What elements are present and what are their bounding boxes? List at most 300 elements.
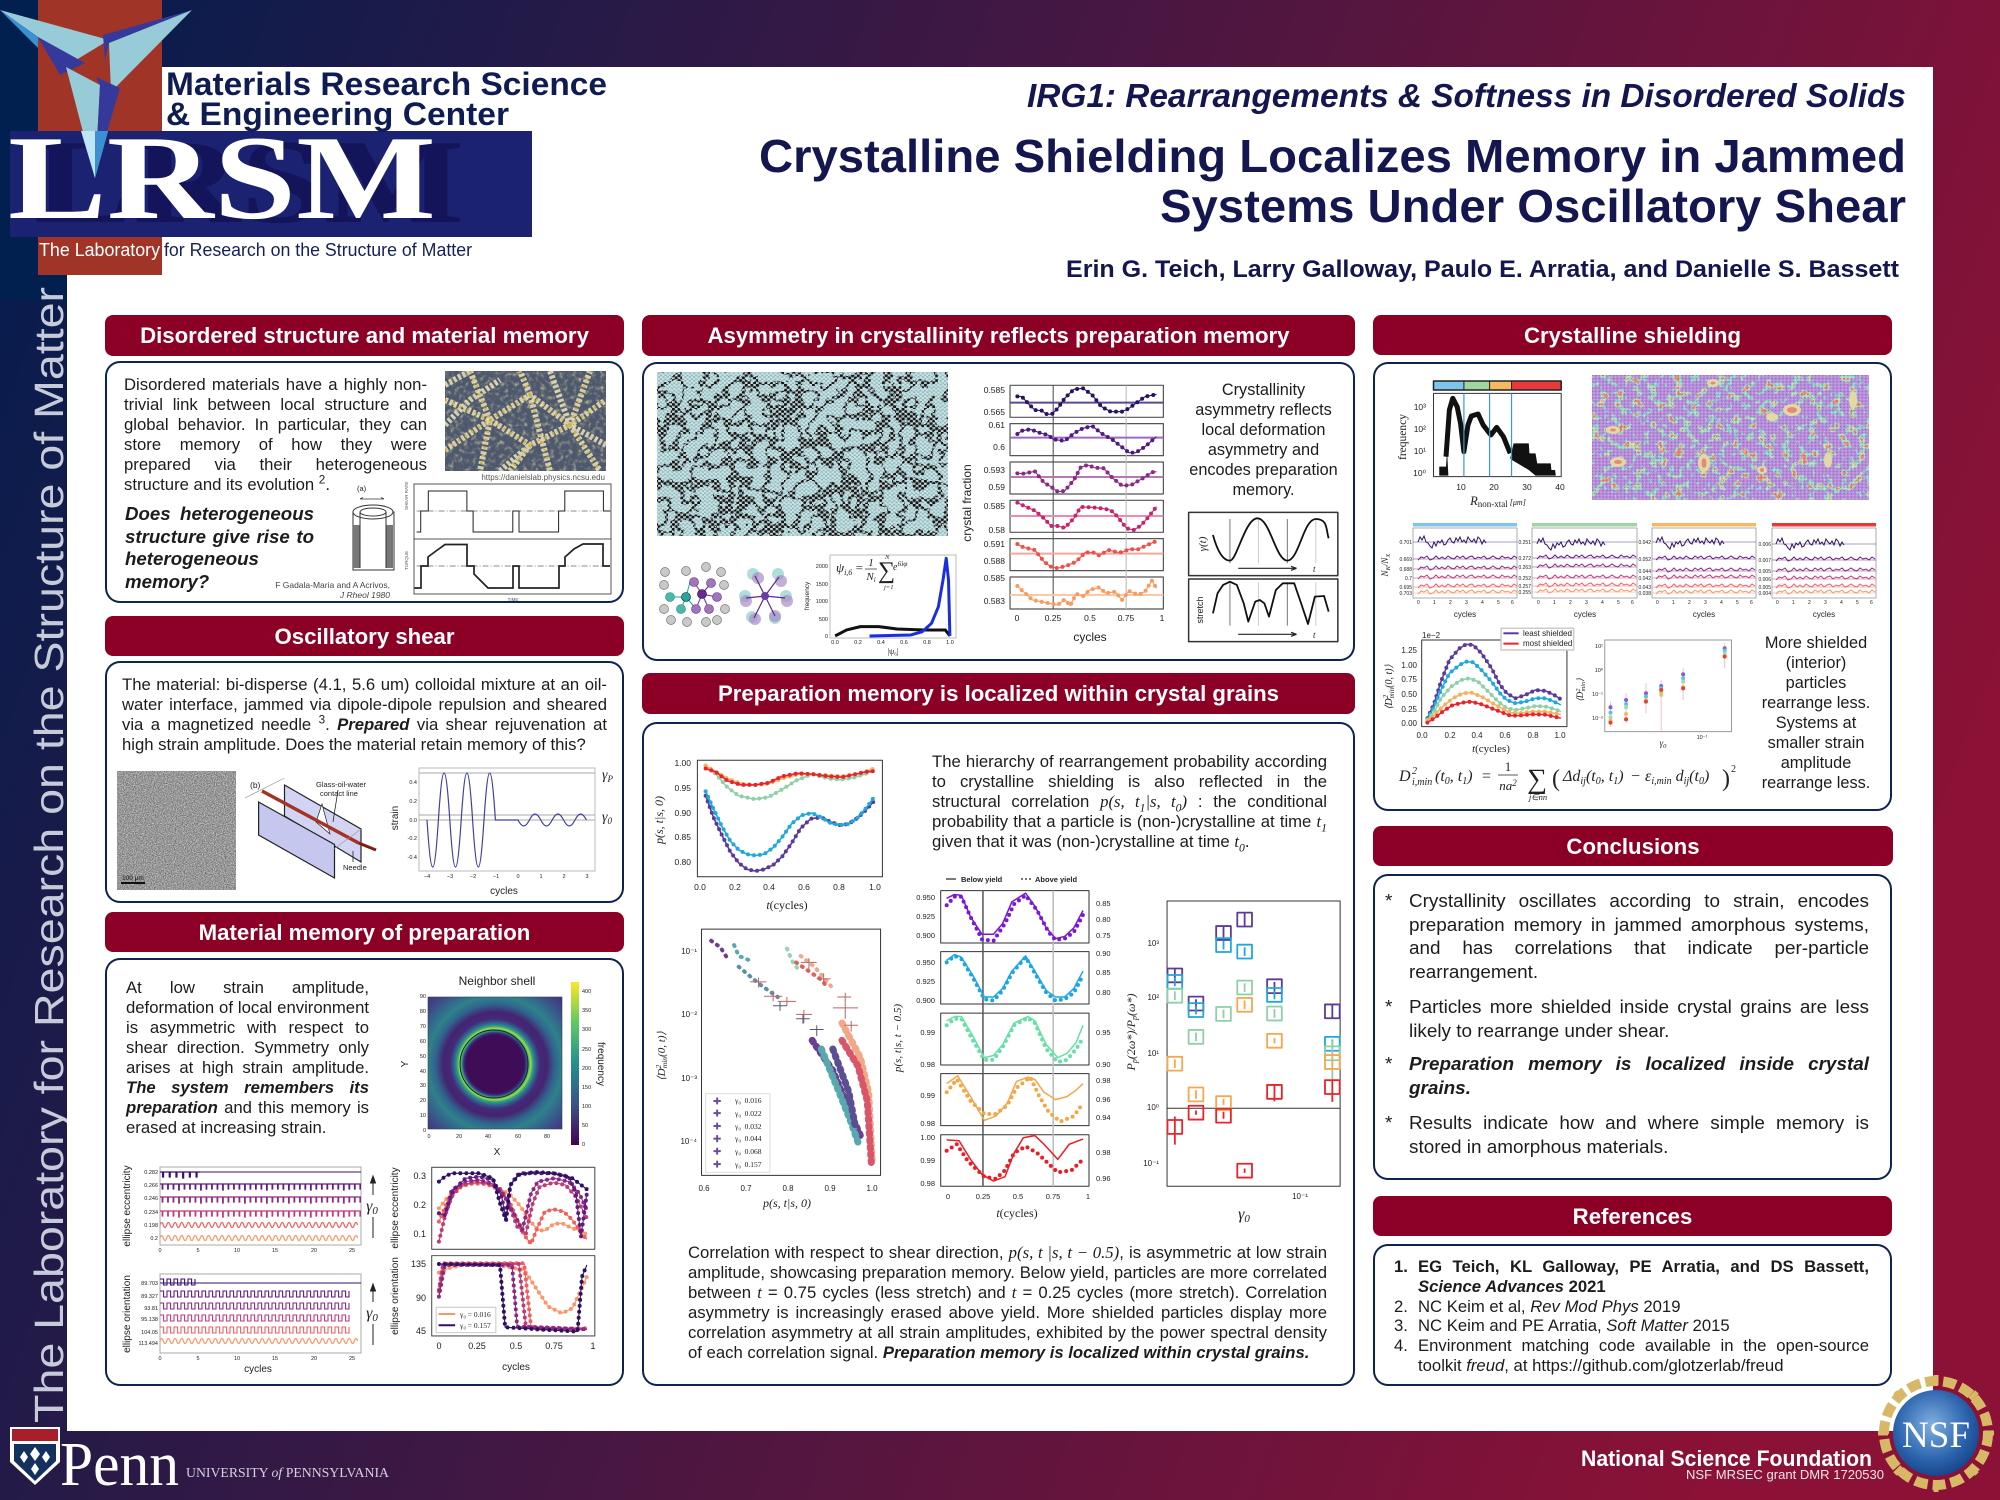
conclusion 4: [1385, 1113, 1869, 1158]
shielding distance histogram: non-xtal: [1478, 499, 1508, 509]
question text: heterogeneous: [125, 548, 259, 569]
title: Systems Under Oscillatory Shear: [1160, 180, 1906, 232]
D2min vs correlation scatter: 0.8: [782, 1184, 794, 1193]
psi6 histogram: 0.8: [923, 640, 931, 646]
neighbor shell heatmap: 80: [544, 1134, 550, 1140]
orientation per cycle chart: 45: [416, 1326, 426, 1336]
crystal fraction charts: crystal fraction: [960, 464, 974, 542]
conclusion 4: stored in amorphous materials.: [1409, 1136, 1668, 1158]
psi6 histogram: 1500: [816, 582, 828, 588]
crystal fraction by shielding charts: 0.695: [1399, 585, 1412, 591]
crystallinity caption: encodes preparation: [1189, 461, 1338, 479]
reference list: NC Keim and PE Arratia, Soft Matter 2015: [1418, 1316, 1730, 1335]
neighbor shell heatmap: 80: [420, 1009, 426, 1015]
crystal fraction by shielding charts: /N: [1380, 557, 1390, 567]
stretch schematic: [1189, 579, 1338, 642]
crystal fraction by shielding charts: 0.272: [1518, 556, 1531, 562]
conclusion 1: rearrangement.: [1409, 962, 1538, 982]
panel: conclusions: *: [1385, 1113, 1392, 1134]
crystal fraction by shielding charts: 0.701: [1399, 540, 1412, 546]
D2min vs strain chart: 10⁰: [1595, 667, 1604, 674]
D2min formula: ij: [1684, 776, 1689, 787]
conclusion 1: [1385, 891, 1869, 982]
stretch schematic: t: [1313, 630, 1316, 640]
reference list: Science Advances 2021: [1418, 1277, 1606, 1296]
correlation vs time chart: 0.0: [694, 882, 706, 892]
correlation asymmetry stacked chart: 0.925: [916, 912, 935, 921]
shielding distance histogram: 10³: [1414, 402, 1426, 412]
citation: J Rheol 1980: [339, 590, 390, 600]
ellipse orientation time series: 25: [349, 1356, 355, 1362]
shielding caption: rearrange less.: [1762, 694, 1870, 712]
D2min vs strain chart: ⟨D: [1575, 692, 1585, 702]
body text: At low strain amplitude,: [126, 978, 369, 997]
heading: disordered structure: [105, 315, 624, 356]
panel: conclusions: *: [1385, 997, 1392, 1018]
correlation asymmetry stacked chart: 0.925: [916, 977, 935, 986]
D2min vs correlation scatter: ⟨D: [656, 1068, 668, 1081]
D2min formula: (t: [1435, 768, 1445, 785]
crystal fraction charts: 0.588: [984, 556, 1005, 566]
heading: material memory: [105, 912, 624, 952]
conclusion 2: likely to rearrange under shear.: [1409, 1020, 1669, 1042]
D2min vs time chart: (0, t)⟩: [1384, 664, 1395, 688]
neighbor shell heatmap: 0: [423, 1128, 426, 1134]
D2min vs strain chart: γ: [1660, 738, 1663, 748]
neighbor shell heatmap: 20: [456, 1134, 462, 1140]
D2min formula: (t: [1689, 768, 1699, 785]
orientation per cycle chart: γ₀ = 0.157: [459, 1321, 491, 1330]
panel: oscillatory shear: [105, 661, 624, 903]
crystal fraction by shielding charts: 0.043: [1638, 585, 1651, 591]
D2min vs correlation scatter: 10⁻⁴: [680, 1137, 698, 1146]
orientation per cycle chart: 0.5: [510, 1341, 522, 1351]
body text: store memory of how they were: [124, 435, 427, 454]
correlation asymmetry stacked chart: 0.98: [1096, 1148, 1111, 1157]
ellipse eccentricity time series: 5: [196, 1248, 200, 1254]
D2min formula: 0: [1596, 776, 1601, 787]
D2min vs correlation scatter: 10⁻¹: [681, 947, 697, 956]
citation: [275, 580, 390, 600]
crystal fraction by shielding charts: 0.7: [1405, 576, 1412, 582]
conclusion 2: [1385, 997, 1869, 1042]
hierarchy text: The hierarchy of rearrangement probability according: [932, 752, 1327, 771]
orientation per cycle chart: γ₀ = 0.016: [459, 1310, 491, 1319]
neighbor shell heatmap: Neighbor shell: [459, 974, 535, 988]
hierarchy text: structural correlation p(s, t1|s, t0) : the conditional: [932, 792, 1327, 814]
D2min formula: 1: [1613, 776, 1618, 787]
correlation asymmetry stacked chart: 0.99: [920, 1028, 935, 1037]
body text: erased at increasing strain.: [126, 1118, 326, 1137]
eccentricity per cycle chart: ellipse eccentricity: [390, 1167, 401, 1249]
crystal fraction by shielding charts: 6: [1870, 600, 1873, 606]
shielding caption: [1762, 634, 1870, 792]
D2min vs time chart: 0.75: [1401, 675, 1418, 684]
crystal fraction by shielding charts: 4: [1720, 600, 1723, 606]
crystal fraction by shielding charts: N: [1380, 570, 1390, 576]
neighbor shell heatmap: 40: [420, 1069, 426, 1075]
correlation asymmetry stacked chart: p(s, t|s, t − 0.5): [892, 1004, 904, 1073]
ellipse orientation time series: γ: [366, 1305, 372, 1322]
crystal fraction by shielding charts: 4: [1601, 600, 1604, 606]
D2min formula: 2: [1412, 766, 1417, 777]
eccentricity per cycle chart: 0.3: [413, 1171, 426, 1181]
D2min formula: d: [1672, 768, 1685, 785]
D2min vs correlation scatter: γ₀ 0.032: [734, 1122, 762, 1131]
couette cell diagram: [353, 484, 394, 570]
stretch schematic: stretch: [1195, 596, 1205, 624]
neighbor shell heatmap: [400, 974, 606, 1158]
D2min vs correlation scatter: p(s, t|s, 0): [762, 1196, 811, 1210]
correlation vs time chart: 0.4: [763, 882, 775, 892]
crystallinity caption: asymmetry reflects: [1195, 401, 1332, 419]
crystal fraction charts: 0.585: [984, 501, 1005, 511]
power spectral density ratio chart: p: [1130, 1016, 1139, 1021]
D2min vs time chart: 0.0: [1416, 731, 1428, 740]
crystallinity caption: [1189, 381, 1338, 499]
ellipse orientation time series: [122, 1274, 381, 1375]
power spectral density ratio chart: 10³: [1147, 939, 1159, 948]
crystal fraction by shielding charts: 0.688: [1399, 567, 1412, 573]
shielding distance histogram: 10: [1456, 482, 1466, 492]
power spectral density ratio chart: 10⁻¹: [1292, 1192, 1308, 1201]
crystal fraction by shielding charts: 5: [1856, 600, 1859, 606]
crystal fraction by shielding charts: 2: [1449, 600, 1452, 606]
correlation vs time chart: t(cycles): [766, 898, 808, 912]
ellipse orientation time series: ellipse orientation: [122, 1275, 133, 1353]
panel: asymmetry in crystallinity: [642, 362, 1355, 661]
D2min vs time chart: 1.00: [1401, 661, 1418, 670]
power spectral density ratio chart: γ: [1238, 1206, 1244, 1223]
shielding caption: More shielded: [1765, 634, 1867, 652]
D2min vs correlation scatter: 10⁻²: [681, 1010, 697, 1019]
body text: is asymmetric with respect to: [126, 1018, 369, 1037]
panel: conclusions: *: [1385, 891, 1392, 912]
correlation asymmetry stacked chart: 0.95: [1096, 1028, 1111, 1037]
conclusion 1: preparation memory in jammed amorphous systems,: [1409, 914, 1869, 936]
D2min vs correlation scatter: (0, t)⟩: [656, 1031, 668, 1057]
crystal fraction by shielding charts: 0.263: [1518, 565, 1531, 571]
correlation asymmetry stacked chart: 1.00: [920, 1133, 935, 1142]
D2min vs time chart: 0.2: [1444, 731, 1456, 740]
correlation asymmetry stacked chart: 0.900: [916, 931, 935, 940]
psi6 histogram: j=1: [883, 584, 893, 591]
crystal fraction by shielding charts: cycles: [1813, 610, 1835, 619]
crystal fraction charts: 0.583: [984, 596, 1005, 606]
question text: structure give rise to: [125, 526, 314, 546]
rheology traces: TIME: [508, 597, 518, 602]
ellipse orientation time series: 10: [234, 1356, 240, 1362]
panel: references: 3.: [1394, 1316, 1408, 1335]
crystal fraction by shielding charts: 1: [1792, 600, 1795, 606]
correlation vs time chart: 0.80: [674, 857, 691, 867]
eccentricity per cycle chart: [390, 1167, 595, 1249]
shear cell diagram: (b): [250, 780, 261, 790]
crystal fraction by shielding charts: 5: [1617, 600, 1620, 606]
LRSM and MRSEC logo: & Engineering Center: [166, 96, 509, 132]
crystal fraction by shielding charts: 0.042: [1638, 540, 1651, 546]
LRSM and MRSEC logo: for Research on the Structure of Matter: [164, 240, 472, 260]
ellipse orientation time series: 0: [372, 1312, 378, 1324]
D2min formula: , t: [1450, 768, 1463, 785]
crystal fraction by shielding charts: 0: [1656, 600, 1659, 606]
strain protocol chart: 0.4: [409, 780, 417, 786]
crystal fraction charts: 0.58: [988, 525, 1005, 535]
D2min vs correlation scatter: 0.9: [824, 1184, 836, 1193]
strain protocol chart: cycles: [490, 886, 518, 897]
power spectral density ratio chart: 10²: [1147, 993, 1159, 1002]
heading: asymmetry in crystallinity: Asymmetry in crystallinity reflects preparation memory: [707, 323, 1290, 348]
D2min vs correlation scatter: min: [660, 1057, 669, 1068]
strain protocol chart: 0.0: [409, 818, 417, 824]
crystal fraction by shielding charts: 6: [1511, 600, 1514, 606]
ellipse orientation time series: 104.05: [141, 1330, 158, 1336]
crystal fraction charts: 0.61: [988, 420, 1005, 430]
crystal fraction by shielding charts: 0.006: [1758, 577, 1771, 583]
crystallinity caption: Crystallinity: [1222, 381, 1305, 399]
psi6 histogram: 500: [819, 617, 828, 623]
shielding distance histogram: 40: [1555, 482, 1565, 492]
shielding caption: rearrange less.: [1762, 774, 1870, 792]
orientation per cycle chart: [390, 1256, 596, 1373]
reference list: toolkit freud, at https://github.com/glotzerlab/freud: [1418, 1356, 1784, 1375]
D2min vs strain chart: 2: [1575, 688, 1582, 692]
neighbor shell heatmap: 50: [582, 1123, 588, 1129]
D2min vs time chart: 0.25: [1401, 705, 1418, 714]
correlation asymmetry stacked chart: 0.25: [976, 1192, 990, 1201]
correlation asymmetry stacked chart: 0.99: [920, 1091, 935, 1100]
body text: arises at high strain amplitude.: [126, 1058, 369, 1077]
crystal fraction by shielding charts: cycles: [1693, 610, 1715, 619]
neighbor shell heatmap: 10: [420, 1113, 426, 1119]
correlation text: [688, 1243, 1327, 1362]
citation: F Gadala-Maria and A Acrivos,: [275, 580, 390, 590]
D2min vs strain chart: 10⁻¹: [1697, 735, 1708, 741]
D2min vs correlation scatter: γ₀ 0.044: [734, 1134, 762, 1143]
crystal fraction by shielding charts: 0.007: [1758, 558, 1771, 564]
strain schematic: [1189, 512, 1338, 576]
eccentricity per cycle chart: 0.1: [413, 1229, 426, 1239]
body text: [124, 375, 427, 494]
psi6 histogram: 0: [825, 634, 828, 640]
question text: Does heterogeneous: [125, 503, 314, 524]
power spectral density ratio chart: (ω*): [1124, 994, 1138, 1016]
neighbor shell heatmap: 60: [515, 1134, 521, 1140]
correlation asymmetry stacked chart: 0.5: [1013, 1192, 1023, 1201]
D2min vs strain chart: min: [1580, 682, 1587, 692]
heading: oscillatory shear: Oscillatory shear: [274, 624, 455, 648]
reference list: Environment matching code available in the open-source: [1418, 1336, 1869, 1355]
psi6 histogram: 1: [868, 557, 874, 569]
D2min vs correlation scatter: [654, 929, 881, 1210]
correlation vs time chart: 0.85: [674, 832, 691, 842]
correlation asymmetry stacked chart: 0.900: [916, 996, 935, 1005]
ellipse orientation time series: 89.327: [141, 1294, 158, 1300]
shear cell diagram: Needle: [343, 863, 367, 872]
ellipse eccentricity time series: γ: [366, 1198, 372, 1215]
neighbor shell heatmap: 0: [582, 1142, 585, 1148]
orientation per cycle chart: 1: [590, 1341, 596, 1351]
body text: water interface, jammed via dipole-dipole repulsion and sheared: [122, 695, 607, 714]
LRSM and MRSEC logo: The Laboratory: [39, 240, 160, 260]
D2min vs correlation scatter: 0.6: [698, 1184, 710, 1193]
correlation asymmetry stacked chart: 0.75: [1096, 931, 1111, 940]
crystal fraction by shielding charts: 2: [1688, 600, 1691, 606]
correlation asymmetry stacked chart: 0.94: [1096, 1113, 1111, 1122]
body text: The system remembers its: [126, 1078, 369, 1097]
D2min formula: i,min: [1412, 777, 1432, 788]
Penn logo: Penn: [60, 1431, 179, 1499]
correlation asymmetry stacked chart: [892, 875, 1111, 1220]
heading: preparation memory localized: Preparation memory is localized within crystal grains: [718, 681, 1279, 706]
D2min vs correlation scatter: γ₀ 0.157: [734, 1160, 762, 1169]
D2min formula: 1: [1462, 776, 1467, 787]
ellipse orientation time series: 89.703: [141, 1281, 158, 1287]
crystallinity caption: asymmetry and: [1208, 441, 1319, 459]
correlation asymmetry stacked chart: Above yield: [1035, 875, 1078, 884]
reference list: NC Keim et al, Rev Mod Phys 2019: [1418, 1297, 1680, 1316]
funding text: NSF MRSEC grant DMR 1720530: [1686, 1467, 1884, 1482]
shielding distance histogram: [1397, 381, 1565, 509]
shielding color map: [1592, 375, 1869, 500]
particle map micrograph: [657, 372, 948, 536]
body text: shear direction. Symmetry only: [126, 1038, 369, 1057]
correlation vs time chart: 1.00: [674, 758, 691, 768]
orientation per cycle chart: cycles: [502, 1362, 530, 1373]
panel: conclusions: *: [1385, 1054, 1392, 1075]
psi6 histogram: N: [866, 571, 874, 583]
D2min vs time chart: [1382, 628, 1574, 755]
D2min vs correlation scatter: γ₀ 0.022: [734, 1109, 762, 1118]
neighbor shell heatmap: 400: [582, 989, 591, 995]
funding text: National Science Foundation: [1581, 1446, 1872, 1471]
correlation asymmetry stacked chart: 0.98: [920, 1060, 935, 1069]
D2min vs time chart: t(cycles): [1472, 743, 1510, 755]
bond-order particle diagram: [660, 562, 730, 626]
crystal fraction charts: 0.593: [984, 465, 1005, 475]
correlation asymmetry stacked chart: t(cycles): [996, 1206, 1038, 1220]
eccentricity per cycle chart: 0.2: [413, 1200, 426, 1210]
crystal fraction by shielding charts: 3: [1465, 600, 1468, 606]
psi6 histogram: |ψ₆|: [888, 647, 898, 656]
conclusion 3: [1385, 1054, 1870, 1098]
neighbor shell heatmap: 40: [485, 1134, 491, 1140]
strain protocol chart: 0.2: [409, 799, 417, 805]
conclusion 3: Preparation memory is localized inside crystal: [1409, 1054, 1869, 1075]
crystal fraction charts: 0.585: [984, 573, 1005, 583]
crystal fraction by shielding charts: 6: [1750, 600, 1753, 606]
psi6 histogram: ψ: [836, 560, 844, 575]
crystal fraction by shielding charts: 0.038: [1638, 591, 1651, 597]
micrograph: 100 μm: [122, 875, 144, 882]
correlation asymmetry stacked chart: 0.98: [1096, 1076, 1111, 1085]
shielding caption: particles: [1786, 674, 1846, 692]
D2min vs strain chart: [1575, 640, 1731, 750]
crystal fraction by shielding charts: 2: [1808, 600, 1811, 606]
crystal fraction charts: cycles: [1073, 630, 1107, 644]
crystal fraction by shielding charts: 0: [1537, 600, 1540, 606]
D2min formula: Δd: [1563, 768, 1580, 785]
correlation text: amplitude, showcasing preparation memory. Below yield, particles are more correlated: [688, 1263, 1327, 1282]
ellipse orientation time series: 5: [196, 1356, 200, 1362]
crystal fraction by shielding charts: 0.669: [1399, 557, 1412, 563]
strain protocol chart: −4: [424, 874, 430, 880]
body text: deformation of local environment: [126, 998, 369, 1017]
crystal fraction by shielding charts: 3: [1704, 600, 1707, 606]
shielding distance histogram: 10¹: [1414, 446, 1426, 456]
crystal fraction by shielding charts: 1: [1672, 600, 1675, 606]
panel: references: 2.: [1394, 1297, 1408, 1316]
correlation vs time chart: 0.6: [798, 882, 810, 892]
reference list: [1394, 1257, 1869, 1375]
hierarchy text: given that it was (non-)crystalline at time t0.: [932, 832, 1249, 854]
psi6 histogram: 1000: [816, 599, 828, 605]
ellipse orientation time series: 0: [158, 1356, 162, 1362]
crystal fraction by shielding charts: 4: [1840, 600, 1843, 606]
power spectral density ratio chart: 10⁰: [1147, 1103, 1159, 1112]
orientation per cycle chart: 90: [416, 1293, 426, 1303]
LRSM and MRSEC logo: Materials Research Science: [166, 66, 607, 102]
power spectral density ratio chart: [1124, 901, 1340, 1225]
orientation per cycle chart: 0.25: [468, 1341, 486, 1351]
correlation asymmetry stacked chart: 0.950: [916, 958, 935, 967]
power spectral density ratio chart: p: [1130, 1059, 1139, 1064]
D2min formula: D: [1398, 768, 1411, 785]
header logos and title block: [0, 0, 1906, 300]
body text: via a magnetized needle 3. Prepared via shear rejuvenation at: [122, 713, 607, 734]
shielding distance histogram: 10⁰: [1413, 468, 1427, 478]
ellipse eccentricity time series: 0.234: [144, 1210, 158, 1216]
heading: crystalline shielding: Crystalline shielding: [1524, 322, 1741, 348]
correlation vs time chart: p(s, t|s, 0): [652, 796, 666, 845]
crystal fraction charts: 0.565: [984, 407, 1005, 417]
neighbor shell heatmap: 100: [582, 1104, 591, 1110]
crystal fraction by shielding charts: 2: [1569, 600, 1572, 606]
hierarchy text: [932, 752, 1327, 854]
correlation vs time chart: [652, 758, 882, 912]
question text: [125, 503, 314, 592]
power spectral density ratio chart: (2ω*)/P: [1124, 1019, 1138, 1059]
power spectral density ratio chart: 0: [1244, 1213, 1250, 1225]
strain schematic: γ(t): [1197, 536, 1209, 551]
neighbor shell heatmap: Y: [400, 1060, 411, 1067]
shielding distance histogram: frequency: [1397, 414, 1409, 460]
correlation text: asymmetry is increasingly erased above yield. More shielded particles display more: [688, 1303, 1327, 1322]
D2min vs time chart: 0.50: [1401, 690, 1418, 699]
D2min formula: =: [1482, 768, 1491, 785]
ellipse eccentricity time series: 15: [272, 1248, 278, 1254]
orientation per cycle chart: 135: [411, 1259, 426, 1269]
strain protocol chart: 3: [585, 874, 589, 880]
panel: disordered structure: [105, 361, 624, 603]
power spectral density ratio chart: P: [1124, 1063, 1138, 1070]
panel: preparation memory localized: [642, 722, 1355, 1386]
D2min formula: ): [1722, 766, 1730, 792]
question text: memory?: [125, 570, 209, 592]
crystal fraction by shielding charts: 0.255: [1518, 590, 1531, 596]
neighbor shell heatmap: X: [494, 1147, 501, 1158]
correlation asymmetry stacked chart: 0.90: [1096, 949, 1111, 958]
crystal fraction by shielding charts: 0: [1417, 600, 1420, 606]
crystal fraction by shielding charts: 0.044: [1638, 569, 1651, 575]
LRSM and MRSEC logo: LRSM: [34, 115, 464, 248]
footer logos and funding: [10, 1375, 1994, 1499]
panel: crystalline shielding: [1373, 362, 1892, 811]
psi6 histogram: frequency: [804, 581, 811, 610]
ellipse eccentricity time series: [122, 1165, 378, 1252]
conclusion 1: and has correlations that indicate per-particle: [1409, 938, 1869, 959]
Penn logo: UNIVERSITY of PENNSYLVANIA: [186, 1465, 389, 1480]
